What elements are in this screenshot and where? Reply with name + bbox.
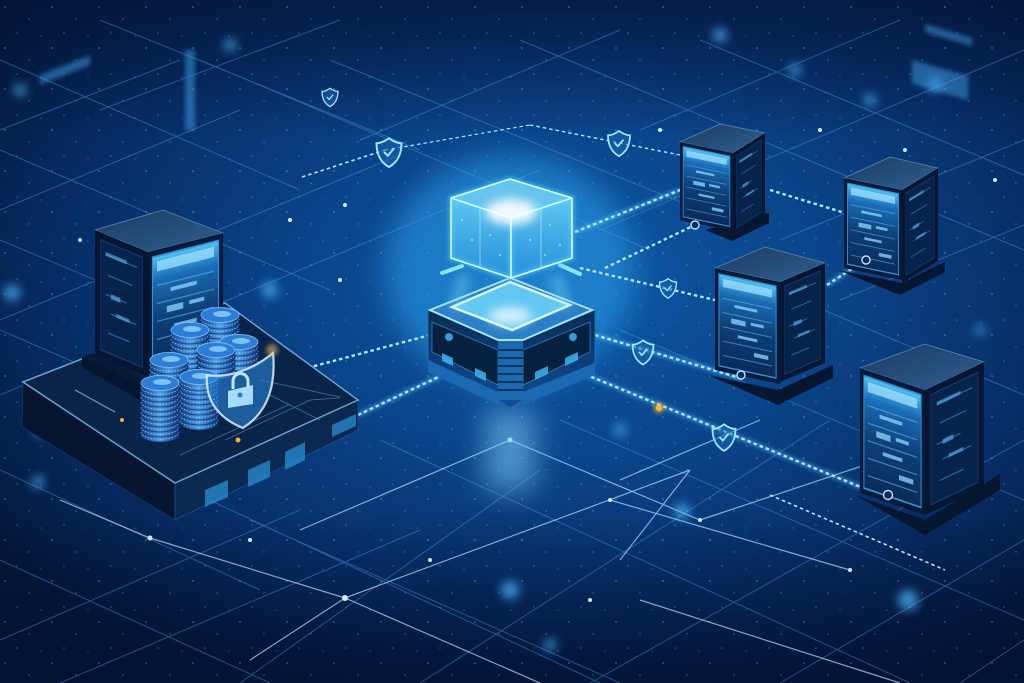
holographic cube xyxy=(442,179,580,310)
gold sparks xyxy=(466,358,662,411)
icon: shield 5 xyxy=(632,340,654,365)
dotted connections xyxy=(270,125,945,570)
icon: shield 6 xyxy=(712,424,736,451)
icon: shield 3 xyxy=(608,131,630,156)
bright grid lines xyxy=(60,420,940,683)
platform xyxy=(22,303,358,520)
server rack 3 xyxy=(708,247,833,405)
icon: shield with lock xyxy=(207,344,278,428)
dotted connection glow xyxy=(358,190,880,495)
hub base xyxy=(428,278,595,408)
central hub xyxy=(428,179,595,408)
top data blocks xyxy=(40,24,972,130)
grid nodes xyxy=(78,128,997,602)
center reflection xyxy=(485,410,535,490)
icon: shield 1 xyxy=(322,88,338,107)
server rack 4 xyxy=(855,344,1000,535)
icon: shield 2 xyxy=(376,138,402,167)
left vault platform xyxy=(22,210,358,520)
coin stacks xyxy=(141,308,258,442)
icon: shield badges xyxy=(322,88,736,451)
icon: shield 4 xyxy=(660,279,676,298)
left server xyxy=(82,210,223,400)
server rack 2 xyxy=(838,157,945,295)
server rack 1 xyxy=(680,124,769,241)
center glow xyxy=(385,155,635,385)
